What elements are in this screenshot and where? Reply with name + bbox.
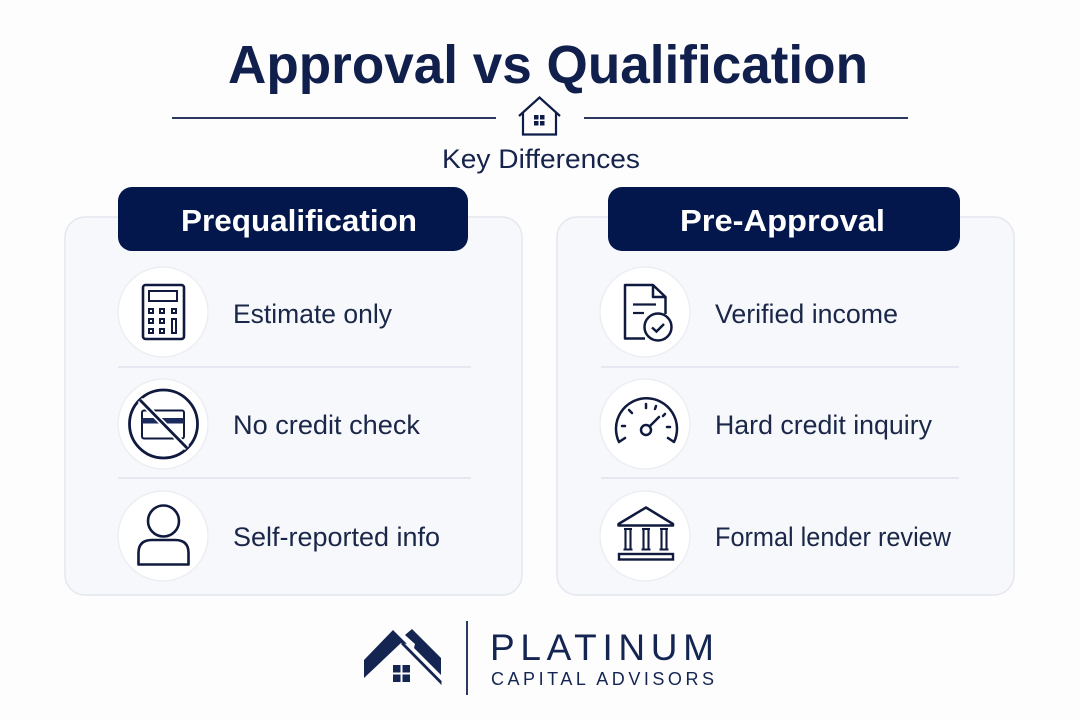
- text: verified income: Verified income: [715, 299, 898, 329]
- text: estimate only: Estimate only: [233, 299, 392, 329]
- icon: verified document: [600, 267, 690, 357]
- icon: credit gauge: [600, 379, 690, 469]
- icon: no credit card: [118, 379, 208, 469]
- logo mark: house roof: [364, 629, 442, 685]
- panel: pre-approval: [557, 187, 1014, 595]
- header divider with house icon: [172, 98, 908, 134]
- logo tagline: CAPITAL ADVISORS: [491, 669, 714, 689]
- title: Approval vs Qualification: [228, 35, 868, 95]
- heading: prequalification: Prequalification: [181, 203, 417, 238]
- icon: calculator: [118, 267, 208, 357]
- heading: prequalification: [118, 187, 468, 251]
- panel: prequalification: [65, 187, 522, 595]
- text: formal lender review: Formal lender review: [715, 522, 951, 552]
- text: self-reported info: Self-reported info: [233, 522, 440, 552]
- text: hard credit inquiry: Hard credit inquiry: [715, 410, 932, 440]
- icon: person: [118, 491, 208, 581]
- subtitle: Key Differences: [442, 144, 640, 174]
- logo wordmark: PLATINUM: [490, 627, 714, 668]
- heading: pre-approval: [608, 187, 960, 251]
- heading: pre-approval: Pre-Approval: [680, 203, 885, 238]
- logo: platinum capital advisors: [364, 621, 714, 695]
- text: no credit check: No credit check: [233, 410, 420, 440]
- icon: bank building: [600, 491, 690, 581]
